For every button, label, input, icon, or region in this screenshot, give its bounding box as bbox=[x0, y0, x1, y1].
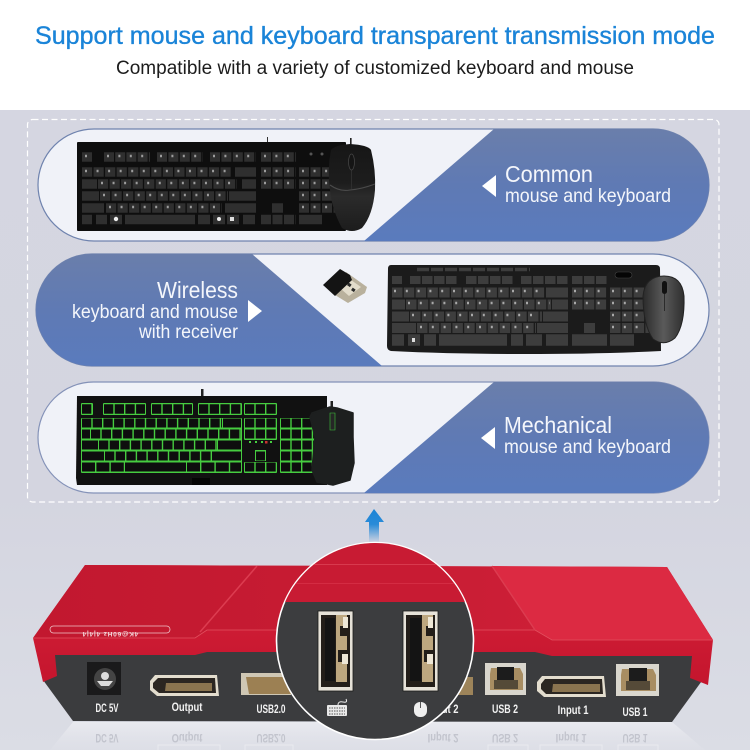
icon: mechanical mouse bbox=[310, 401, 354, 485]
text: mechanical label: Mechanical bbox=[504, 412, 612, 438]
port labels: USB2.0 bbox=[257, 704, 286, 716]
usb port: keyboard bbox=[318, 611, 353, 691]
text: common label bbox=[505, 161, 671, 207]
icon: right triangle bbox=[248, 300, 262, 322]
reflection under device: DC 5V bbox=[95, 730, 119, 743]
reflection under device bbox=[50, 722, 705, 750]
text: wireless label: Wireless bbox=[157, 277, 238, 303]
port: usb 2.0 bbox=[241, 673, 292, 695]
text: mechanical label: mouse and keyboard bbox=[504, 437, 671, 458]
icon: usb receiver bbox=[323, 269, 367, 303]
port labels: USB 2 bbox=[492, 704, 518, 716]
icon: left triangle bbox=[481, 427, 495, 449]
icon: mechanical keyboard bbox=[76, 389, 327, 485]
device badge bbox=[50, 626, 170, 637]
reflection under device: USB 2 bbox=[492, 731, 518, 743]
port: output bbox=[150, 675, 219, 696]
reflection under device: Output bbox=[172, 731, 203, 744]
usb port: mouse bbox=[403, 611, 438, 691]
title: Support mouse and keyboard transparent transmission mode bbox=[35, 22, 715, 50]
reflection under device: Input 2 bbox=[428, 731, 459, 744]
icon: common mouse bbox=[329, 138, 375, 231]
port: input 1 bbox=[537, 676, 606, 697]
text: wireless label: keyboard and mouse bbox=[72, 302, 238, 323]
magnifier circle bbox=[270, 540, 480, 740]
reflection under device: Input 1 bbox=[556, 731, 587, 744]
magnifier red lid bbox=[285, 543, 465, 602]
icon: wireless mouse bbox=[643, 276, 684, 343]
port labels: Input 1 bbox=[558, 704, 589, 717]
icon: left triangle bbox=[482, 175, 496, 197]
arrow: up to panels bbox=[365, 509, 384, 543]
reflection under device: USB 1 bbox=[622, 731, 648, 743]
text: wireless label bbox=[72, 277, 239, 343]
device badge: 4K@60Hz 4|4|4 bbox=[82, 630, 138, 637]
device: kvm switch bbox=[33, 565, 713, 722]
dashed frame bbox=[28, 120, 719, 502]
text: wireless label: with receiver bbox=[138, 322, 239, 343]
device lid top bbox=[33, 565, 713, 640]
text: mechanical label bbox=[504, 412, 671, 458]
port: usb 2 bbox=[485, 663, 526, 695]
device body bbox=[43, 650, 704, 722]
text: common label: Common bbox=[505, 161, 593, 187]
device red lid bbox=[33, 565, 713, 685]
port: dc jack bbox=[87, 662, 121, 695]
port labels: DC 5V bbox=[95, 703, 119, 716]
port labels: Input 2 bbox=[428, 703, 459, 716]
panel: mechanical mouse and keyboard bbox=[38, 382, 709, 493]
panel: wireless keyboard and mouse bbox=[36, 254, 709, 366]
subtitle: Compatible with a variety of customized keyboard and mouse bbox=[116, 58, 634, 79]
reflection under device: USB2.0 bbox=[257, 731, 286, 743]
icon: mouse symbol bbox=[414, 702, 427, 717]
port labels bbox=[95, 701, 648, 719]
port labels: USB 1 bbox=[622, 707, 648, 719]
icon: wireless keyboard bbox=[387, 265, 661, 354]
icon: keyboard symbol bbox=[327, 699, 347, 716]
text: common label: mouse and keyboard bbox=[505, 186, 671, 207]
port: usb 1 bbox=[616, 664, 659, 696]
icon: common keyboard bbox=[77, 137, 346, 231]
port labels: Output bbox=[172, 701, 203, 714]
panel: common mouse and keyboard bbox=[38, 129, 709, 241]
port: input 2 bbox=[440, 677, 473, 695]
